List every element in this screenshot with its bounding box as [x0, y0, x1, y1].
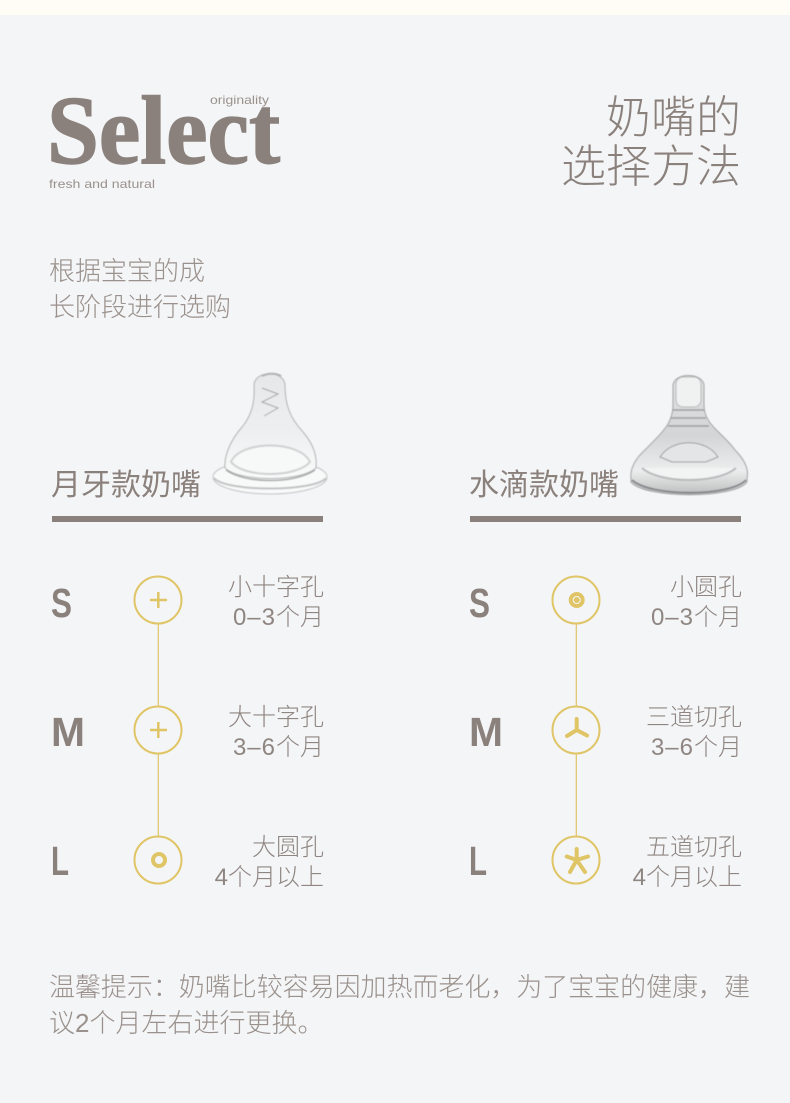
size M: large cross [51, 704, 324, 761]
size M: large cross: 大十字孔 [228, 704, 324, 731]
size L: five-way cut: 4个月以上 [633, 864, 742, 891]
panel: crescent nipple [51, 374, 327, 891]
size L: five-way cut: L [469, 838, 487, 884]
timeline icons: left [134, 576, 182, 884]
size M: three-way cut: 三道切孔 [646, 704, 742, 731]
size L: large round: 4个月以上 [215, 864, 324, 891]
size M: large cross: 3–6个月 [233, 734, 324, 761]
size L: five-way cut: 五道切孔 [646, 834, 742, 861]
size L: large round [51, 834, 324, 891]
nipple image: droplet [631, 376, 748, 495]
size L: five-way cut [469, 834, 742, 891]
footer note: 议2个月左右进行更换。 [49, 1008, 323, 1038]
top cream band [0, 0, 790, 15]
footer note [49, 972, 750, 1038]
subtitle: 根据宝宝的成 [49, 256, 205, 286]
footer note: 温馨提示：奶嘴比较容易因加热而老化，为了宝宝的健康，建 [49, 972, 750, 1002]
size S: small cross [51, 574, 324, 631]
size S: small round: 0–3个月 [651, 604, 742, 631]
size M: large cross: M [51, 709, 85, 755]
panel: droplet nipple [469, 376, 748, 891]
heading: droplet nipple: 水滴款奶嘴 [469, 469, 619, 502]
size S: small round: S [469, 580, 490, 626]
size M: three-way cut: 3–6个月 [651, 734, 742, 761]
timeline icons: right [552, 576, 600, 884]
subtitle: 长阶段进行选购 [49, 292, 231, 322]
title [561, 92, 741, 192]
size L: large round: 大圆孔 [252, 834, 324, 861]
size S: small round [469, 574, 742, 631]
size S: small cross: 0–3个月 [233, 604, 324, 631]
logo: Select: Select [47, 77, 280, 185]
title: 选择方法 [561, 141, 741, 192]
size S: small cross: S [51, 580, 72, 626]
size M: three-way cut [469, 704, 742, 761]
subtitle [49, 256, 231, 322]
heading: crescent nipple: 月牙款奶嘴 [51, 469, 201, 502]
logo: Select: originality [210, 93, 269, 107]
heading: droplet nipple [469, 469, 741, 522]
logo: Select: fresh and natural [49, 177, 155, 191]
size S: small cross: 小十字孔 [228, 574, 324, 601]
title: 奶嘴的 [606, 92, 741, 143]
size M: three-way cut: M [469, 709, 503, 755]
size L: large round: L [51, 838, 69, 884]
nipple image: crescent [213, 374, 327, 494]
heading: crescent nipple [51, 469, 323, 522]
size S: small round: 小圆孔 [670, 574, 742, 601]
